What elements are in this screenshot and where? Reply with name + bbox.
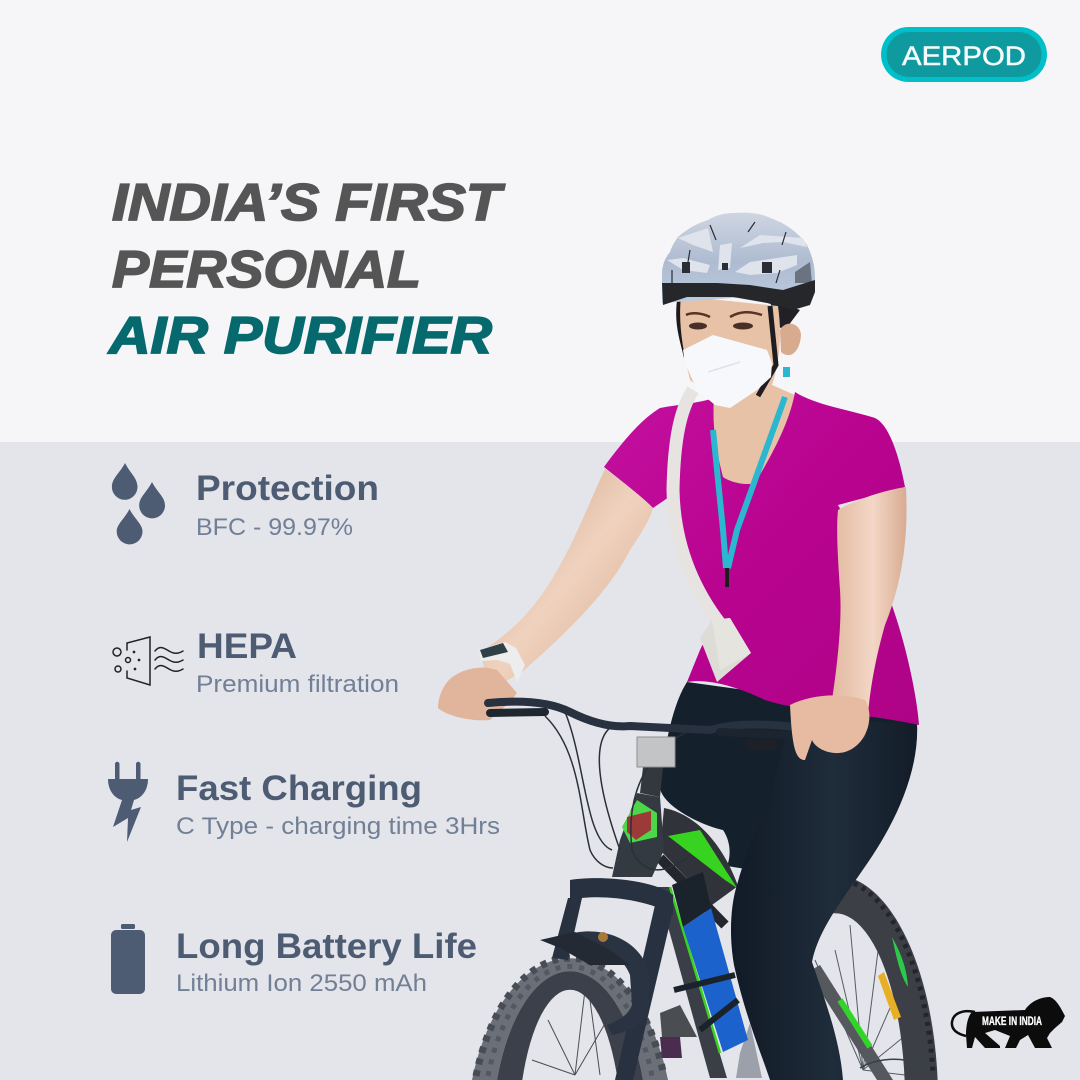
air purifier neck tube	[673, 390, 721, 625]
rear wheel	[790, 875, 938, 1080]
heading: long battery life: Long Battery Life	[176, 927, 477, 966]
icon: HEPA filter	[113, 637, 183, 685]
illustration: cyclist wearing air purifier	[438, 213, 938, 1080]
text: lithium ion capacity: Lithium Ion 2550 mAh	[176, 970, 427, 997]
bike helmet	[662, 213, 815, 310]
background: bottom grey panel	[0, 442, 1080, 1080]
title: India's first personal air purifier: INDIA’S FIRST	[112, 174, 506, 232]
face mask with straps	[683, 306, 790, 408]
right arm	[832, 487, 907, 715]
feature: fast charging	[108, 762, 500, 842]
handlebar with brake levers	[488, 702, 862, 745]
title: India's first personal air purifier	[107, 174, 506, 365]
title: India's first personal air purifier: AIR PURIFIER	[107, 307, 492, 365]
lanyard	[713, 397, 785, 587]
left leg and hips	[660, 682, 917, 870]
logo: AERPOD badge: AERPOD	[902, 41, 1026, 71]
make in india lion logo	[952, 997, 1065, 1048]
stem	[640, 767, 663, 797]
text: premium filtration: Premium filtration	[196, 671, 399, 698]
icon: battery	[111, 924, 145, 994]
feature: HEPA	[113, 627, 399, 698]
left hand	[438, 668, 517, 720]
icon: plug with lightning bolt	[108, 762, 148, 842]
air purifier device	[700, 618, 751, 682]
feature: long battery life	[111, 924, 477, 997]
front reflector	[637, 737, 675, 767]
shirt	[604, 392, 919, 725]
background: top light panel	[0, 0, 1080, 442]
front wheel	[472, 958, 668, 1080]
heading: fast charging: Fast Charging	[176, 769, 422, 808]
seat tube and pedal behind	[660, 1005, 762, 1078]
icon: water drops	[112, 463, 165, 544]
make in india lion logo: MAKE IN INDIA	[982, 1014, 1042, 1028]
bicycle frame	[657, 808, 738, 1078]
front leg	[731, 720, 917, 1080]
head tube	[612, 793, 664, 877]
frame badge	[622, 800, 657, 843]
text: BFC value: BFC - 99.97%	[196, 514, 353, 541]
title: India's first personal air purifier: PERSONAL	[112, 241, 421, 299]
smart watch	[479, 642, 525, 682]
brake cables	[545, 712, 690, 870]
heading: protection: Protection	[196, 469, 379, 508]
neck and face	[676, 296, 801, 484]
feature: protection	[112, 463, 379, 544]
right hand	[790, 695, 869, 760]
logo: AERPOD badge	[881, 27, 1047, 82]
text: charging time: C Type - charging time 3Hrs	[176, 813, 500, 840]
water bottle	[672, 872, 748, 1052]
heading: HEPA: HEPA	[197, 627, 297, 666]
left arm	[480, 469, 653, 690]
front fork and fender	[540, 878, 673, 1080]
